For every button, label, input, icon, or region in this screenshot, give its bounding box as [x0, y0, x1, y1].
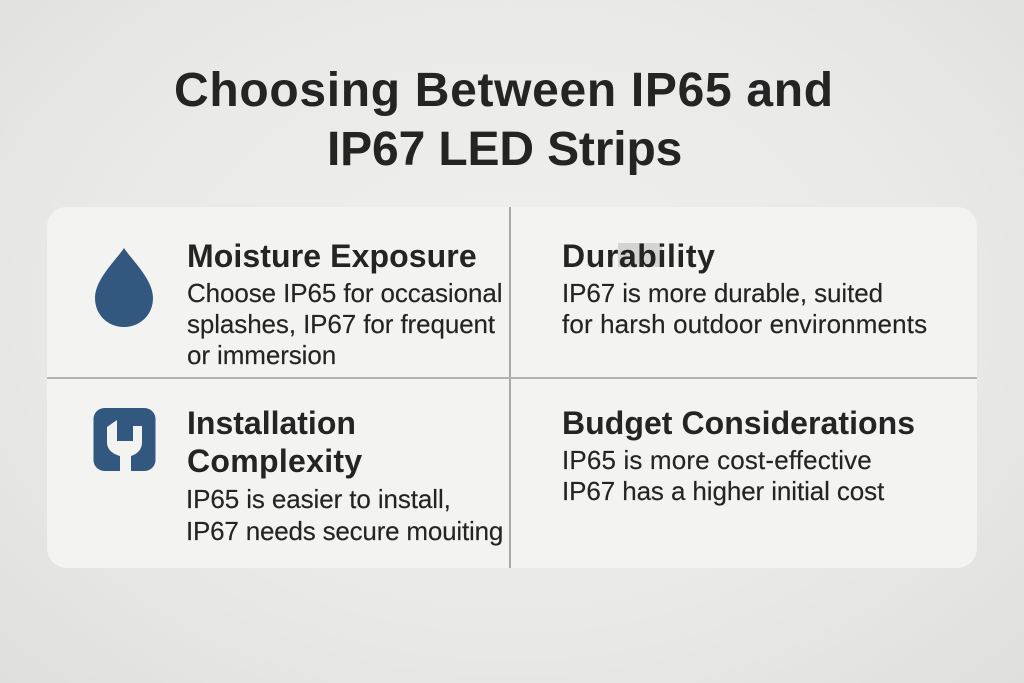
text: installation complexity	[186, 484, 503, 546]
text: installation complexity: IP65 is easier to install,	[186, 484, 451, 514]
text: budget considerations: IP67 has a higher initial cost	[562, 476, 884, 506]
heading: installation complexity	[187, 405, 362, 479]
icon: wrench	[94, 408, 156, 471]
text: moisture exposure: or immersion	[187, 340, 336, 370]
text: budget considerations	[562, 445, 884, 506]
heading: installation complexity: Complexity	[187, 443, 362, 479]
text: moisture exposure: splashes, IP67 for frequent	[187, 309, 495, 339]
heading: budget considerations: Budget Considerations	[562, 405, 915, 441]
grid line horizontal	[47, 377, 977, 379]
text: durability	[562, 278, 927, 339]
text: durability: for harsh outdoor environments	[562, 309, 927, 339]
title: IP67 LED Strips	[327, 123, 682, 176]
text: durability: IP67 is more durable, suited	[562, 278, 883, 308]
heading: durability: Durability	[562, 238, 716, 274]
text: moisture exposure	[187, 278, 502, 370]
panel: comparison card	[47, 207, 977, 568]
title: Choosing Between IP65 and	[174, 64, 834, 117]
text: budget considerations: IP65 is more cost-effective	[562, 445, 872, 475]
grid line vertical	[509, 207, 511, 568]
text: installation complexity: IP67 needs secure mouiting	[186, 516, 503, 546]
heading: moisture exposure: Moisture Exposure	[187, 238, 477, 274]
title	[174, 64, 834, 176]
smudge behind durability heading	[618, 243, 662, 267]
text: moisture exposure: Choose IP65 for occasional	[187, 278, 502, 308]
heading: installation complexity: Installation	[187, 405, 356, 441]
icon: water drop	[95, 248, 153, 327]
